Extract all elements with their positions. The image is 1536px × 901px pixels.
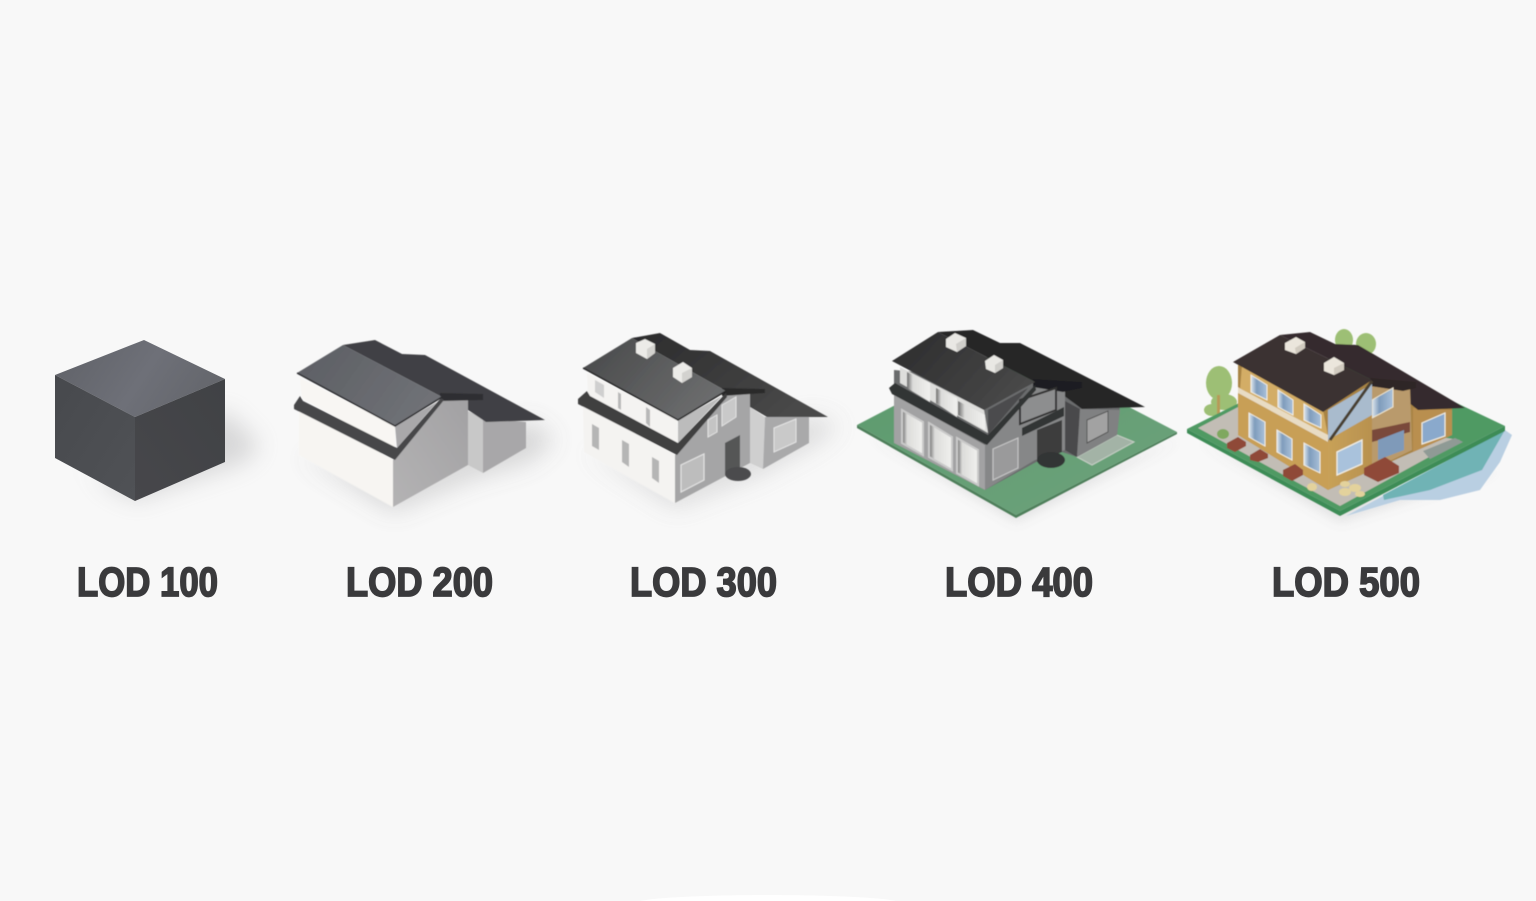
eave strip [1370,378,1416,391]
label: LOD 100: LOD 100 [77,559,218,605]
band roof [889,383,1036,445]
label: LOD 200: LOD 200 [346,559,493,605]
main roof [583,338,726,420]
tan facade right [1328,385,1372,490]
windows front [595,380,604,398]
windows front [1251,375,1267,400]
LOD 200: simple house massing [294,340,555,512]
recessed middle [1372,383,1412,470]
annex [750,407,765,469]
front wall [894,395,985,490]
white front wall [583,405,675,503]
trees [1204,329,1376,416]
upper windows [907,372,930,402]
silhouette backing [1238,365,1452,490]
LOD 300: house with windows and chimneys [578,333,840,508]
gable wall [985,387,1065,490]
eave strip [1033,379,1082,392]
back roof [632,333,828,417]
LOD 100: solid massing cube [55,340,260,501]
back roof [1280,332,1465,410]
label: LOD 400: LOD 400 [945,559,1093,605]
ground plate [1187,350,1505,511]
label: LOD 500: LOD 500 [1272,559,1420,605]
chimneys [636,339,655,359]
LOD 400: detailed gray house on green lot [857,330,1180,522]
silhouette backing [894,370,1120,490]
chimneys [1285,337,1305,354]
annex [1063,400,1080,457]
LOD 500: fully detailed coloured house [1187,329,1512,522]
eave strip [440,393,483,401]
label: LOD 300: LOD 300 [630,559,777,605]
band roof [578,391,727,455]
lower windows [902,410,923,455]
water shadow [1346,430,1512,516]
stones [1307,481,1365,497]
eave strip [722,388,765,396]
chimneys [946,333,966,352]
tan facade front [1238,393,1328,490]
main roof [1233,335,1372,412]
main roof [892,332,1035,410]
ground plate [857,345,1177,515]
furniture [1227,437,1399,482]
gable wall [675,392,750,503]
back roof [938,330,1145,409]
annex [1413,408,1452,452]
